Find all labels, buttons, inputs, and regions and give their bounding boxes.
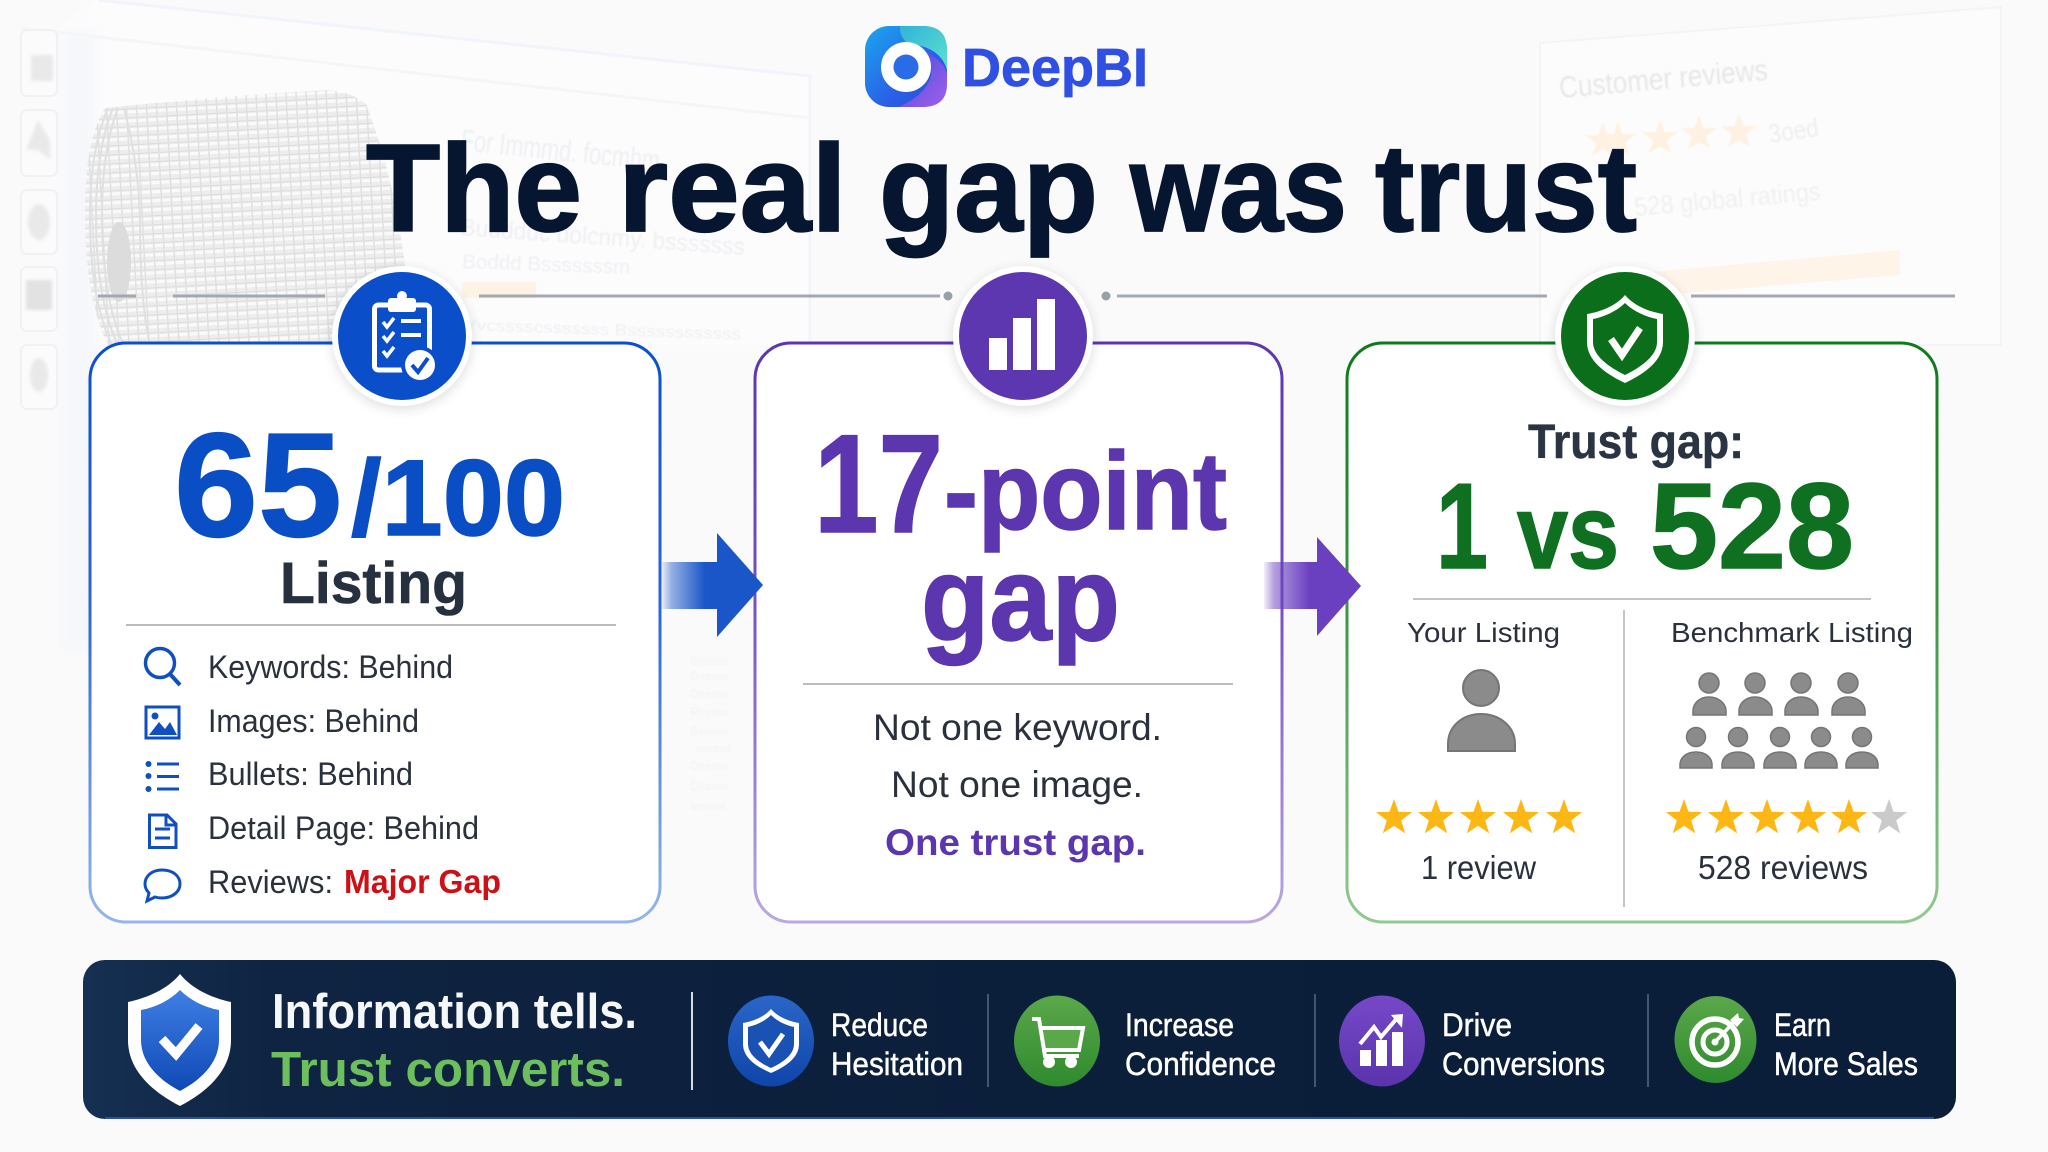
icon: DeepBI mark [865,26,947,107]
banner: takeaway [83,960,1956,1119]
row: Detail Page: Detail Page: Behind [208,810,479,846]
ghost listing text: Yvcsssscsssssss Bssssssssssss [465,317,741,344]
icon: single person [1448,670,1515,751]
message: Trust converts. [271,1043,625,1097]
headline: 17-point gap: gap [921,532,1120,666]
ghost listing text: Buddddc dolcnmy. bsssssss [460,214,746,261]
logo: DeepBI [865,26,1148,107]
row: Reviews: Reviews: [208,864,333,900]
score: 65/100 [174,403,565,568]
row: Images: Images: Behind [208,703,419,739]
benefit: reduce hesitation [728,996,963,1086]
icon: large shield [128,974,231,1106]
benefit: earn more sales: Earn [1774,1007,1831,1043]
ghost side text: ssssss [690,799,726,813]
icon: shield check [728,996,814,1086]
title [366,120,1637,258]
icon: growth chart [1339,996,1425,1086]
column: Benchmark Listing: 528 reviews [1698,849,1868,886]
ghost side text: Dsssss [690,687,729,701]
benefit: drive conversions: Conversions [1442,1046,1605,1082]
benefit: reduce hesitation: Hesitation [831,1046,963,1082]
column: Your Listing [1376,617,1582,886]
panel: listing score [90,266,660,922]
benefit: drive conversions [1339,996,1605,1086]
arrow: listing to gap [662,533,763,637]
benefit: increase confidence: Increase [1125,1007,1234,1043]
ghosted product page backdrop: Customer reviews [1558,52,1769,105]
ghost side text: Rsssss [690,705,729,719]
title: real [618,120,847,258]
icon: target [1674,996,1756,1083]
title: was [1129,120,1347,258]
column: Your Listing: 1 review [1421,849,1536,886]
benefit: earn more sales [1674,996,1918,1083]
panel: trust gap [1347,266,1937,922]
row: Reviews [145,863,501,901]
ghost side text: Bsssss [690,654,728,668]
headline: 17-point gap [814,405,1227,666]
ghost mesh roll [85,90,405,345]
title: The [366,120,582,258]
ghost listing text: Boddd Bsssssssm [462,251,630,279]
headline: 1 vs 528: vs [1517,474,1619,591]
icon: image [146,707,179,738]
supporting text: Not one image. [891,764,1143,805]
column: Benchmark Listing [1666,617,1913,886]
headline: 1 vs 528: 1 [1436,458,1488,594]
arrow: gap to trust [1264,537,1361,636]
icon: document [150,815,176,848]
icon: cart [1014,996,1100,1086]
icon: group of people [1680,673,1878,768]
icon: shield badge [1555,266,1695,409]
ghost side text: Dsssss [690,669,729,683]
icon: list [146,761,179,792]
benefit: increase confidence: Confidence [1125,1046,1276,1082]
panel: 17-point gap [755,266,1282,922]
title: trust [1375,120,1637,258]
ghosted product page backdrop: 528 global ratings [1633,176,1822,222]
icon: magnifier [146,648,180,685]
ghost thumbnails [21,30,57,409]
supporting text: One trust gap. [885,822,1146,863]
ghosted product page backdrop [20,0,2001,813]
connector lines [98,292,1955,300]
ghost side text: Bsssss [690,724,728,738]
supporting text: Not one keyword. [873,707,1162,748]
title: gap [879,120,1098,258]
icon: speech bubble [145,870,180,901]
ghost reviews card [1540,7,2001,345]
row: Keywords: Keywords: Behind [208,649,453,685]
ghost listing text [459,124,746,344]
ghost side text: Dsssss [690,779,729,793]
headline: 1 vs 528 [1436,458,1854,594]
message [271,985,637,1097]
headline: 17-point gap: 17 [814,405,943,562]
icon: bar chart badge [953,266,1093,409]
icon: clipboard badge [332,266,472,409]
ghost side text: Dsssss [690,759,729,773]
label: Listing: Listing [280,551,467,616]
stars: five gold one grey [1666,799,1907,833]
heading: Trust gap: Trust gap: [1528,416,1744,469]
headline: 17-point gap: -point [944,430,1227,553]
score: 65/100: 65 [174,403,342,568]
column: Benchmark Listing: Benchmark Listing [1671,617,1913,648]
ghost side text [690,654,731,813]
benefit: increase confidence [1014,996,1276,1086]
ghost listing text: For Immmd. focmhm [459,124,662,178]
stars: five gold [1376,799,1582,833]
supporting text [873,707,1162,863]
benefit: reduce hesitation: Reduce [831,1007,928,1043]
ghosted product page backdrop: 3oed [1767,112,1820,149]
logo wordmark: DeepBI [962,38,1148,98]
row: Reviews: Major Gap [344,863,501,900]
benefit: drive conversions: Drive [1442,1007,1512,1043]
message: Information tells. [272,985,637,1039]
headline: 1 vs 528: 528 [1650,458,1854,594]
score: 65/100: /100 [351,437,565,558]
row: Bullets: Bullets: Behind [208,756,413,792]
benefit: earn more sales: More Sales [1774,1046,1918,1082]
column: Your Listing: Your Listing [1407,617,1560,648]
ghost side text: ssssss [695,741,731,755]
